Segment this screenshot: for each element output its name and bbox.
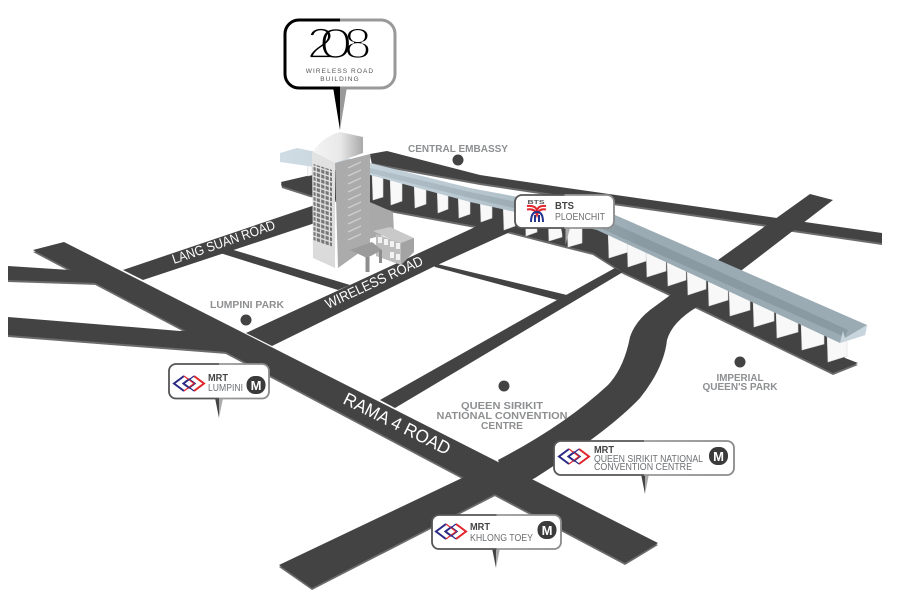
station: MRT Queen Sirikit National Convention Centre xyxy=(554,441,734,494)
station: MRT Lumpini: LUMPINI xyxy=(208,382,243,394)
road: upper left branch xyxy=(8,266,110,295)
station: MRT Queen Sirikit National Convention Centre: QUEEN SIRIKIT NATIONAL xyxy=(594,453,703,465)
road: diagonal connector xyxy=(380,268,623,408)
tail xyxy=(561,228,570,247)
road: side street west xyxy=(220,248,350,290)
callout tail xyxy=(333,87,347,130)
station: BTS Ploenchit: BTS xyxy=(555,201,574,212)
building name: WIRELESS ROAD xyxy=(306,68,374,75)
tower right face stripes xyxy=(348,162,361,240)
logo 208: 2 xyxy=(307,19,334,67)
label box xyxy=(169,364,269,398)
road label: Rama 4 Road: RAMA 4 ROAD xyxy=(340,389,454,459)
place: Imperial Queen's Park: IMPERIAL xyxy=(716,372,764,384)
tower: 208 Wireless Road building xyxy=(312,132,414,272)
label box xyxy=(432,515,561,549)
label box xyxy=(515,195,614,228)
icon: metro M: M xyxy=(713,449,724,464)
BTS viaduct xyxy=(280,148,867,343)
place: Imperial Queen's Park xyxy=(702,356,778,393)
icon: MRT logo xyxy=(436,524,466,539)
canopy xyxy=(350,242,382,272)
station: MRT Lumpini: MRT xyxy=(208,373,228,384)
logo 208 xyxy=(307,19,371,68)
icon: metro M: M xyxy=(542,523,552,538)
tail xyxy=(215,398,223,418)
place: Central Embassy: CENTRAL EMBASSY xyxy=(408,143,508,155)
station: MRT Lumpini xyxy=(169,364,269,418)
icon: BTS logo: BTS xyxy=(528,200,546,206)
callout box xyxy=(285,20,395,88)
tail xyxy=(641,474,649,494)
place: Imperial Queen's Park: QUEEN'S PARK xyxy=(702,381,778,393)
road: lower left branch xyxy=(8,317,240,352)
road: side street east xyxy=(433,263,567,300)
road: under viaduct xyxy=(281,165,858,373)
place: Central Embassy xyxy=(408,143,508,166)
tail xyxy=(492,548,500,568)
station: BTS Ploenchit xyxy=(515,195,614,247)
logo 208: 8 xyxy=(344,19,371,67)
tower right face xyxy=(335,154,370,268)
tower window grid xyxy=(314,164,332,247)
road label: Wireless Road: WIRELESS ROAD xyxy=(323,252,425,312)
road network xyxy=(8,151,882,590)
place: Queen Sirikit National Convention Centre: CENTRE xyxy=(481,420,523,432)
place: Lumpini Park: LUMPINI PARK xyxy=(210,299,284,311)
viaduct pillars xyxy=(307,165,847,362)
low-rise block xyxy=(373,227,414,265)
place: Lumpini Park xyxy=(210,299,284,326)
icon: MRT logo xyxy=(174,376,204,391)
station: MRT Queen Sirikit National Convention Centre: MRT xyxy=(594,445,614,456)
road label: Lang Suan Road: LANG SUAN ROAD xyxy=(170,217,277,267)
tower left face xyxy=(312,152,335,268)
station: MRT Khlong Toey: KHLONG TOEY xyxy=(470,532,533,544)
label box xyxy=(554,441,734,475)
road: Central Embassy xyxy=(370,151,882,243)
callout: 208 Wireless Road Building xyxy=(285,19,395,130)
station: BTS Ploenchit: PLOENCHIT xyxy=(555,211,605,223)
station: MRT Khlong Toey: MRT xyxy=(470,522,490,533)
road: curved north-east road xyxy=(498,194,833,490)
tower roof curve xyxy=(313,132,363,163)
road: Lang Suan xyxy=(123,204,318,280)
logo 208: 0 xyxy=(319,20,352,68)
road: south-west arm xyxy=(279,470,500,588)
annex block xyxy=(365,200,394,240)
icon: metro M xyxy=(709,447,728,465)
station: MRT Khlong Toey xyxy=(432,515,561,568)
place: Queen Sirikit National Convention Centre: NATIONAL CONVENTION xyxy=(436,410,568,422)
place: Queen Sirikit National Convention Centre xyxy=(436,380,568,432)
station: MRT Queen Sirikit National Convention Centre: CONVENTION CENTRE xyxy=(594,461,692,473)
icon: metro M: M xyxy=(251,378,261,393)
icon: MRT logo xyxy=(559,449,589,464)
road: Wireless xyxy=(246,205,510,346)
road: Rama 4 xyxy=(33,242,658,563)
callout: 208 Wireless Road Building: BUILDING xyxy=(320,76,360,83)
place: Queen Sirikit National Convention Centre: QUEEN SIRIKIT xyxy=(461,400,544,412)
